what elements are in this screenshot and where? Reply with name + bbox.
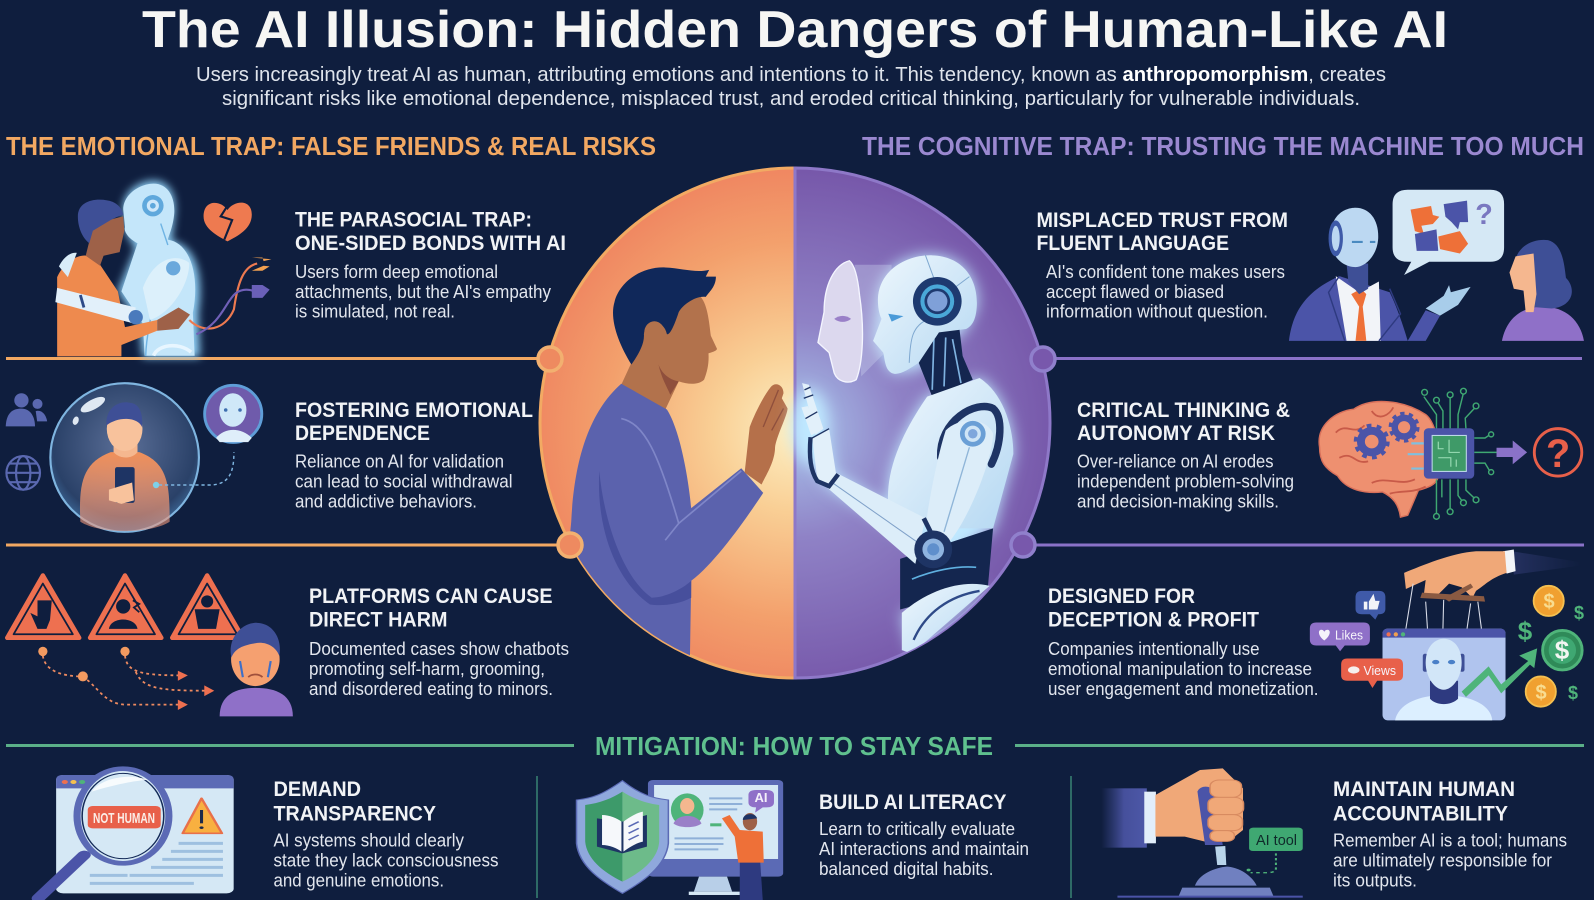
heading: ACCOUNTABILITY <box>1333 802 1508 826</box>
heading: DEMAND <box>274 777 361 801</box>
body text: Companies intentionally use <box>1048 638 1260 659</box>
heading: ONE-SIDED BONDS WITH AI <box>295 231 566 255</box>
body text <box>295 261 552 322</box>
heading: THE PARASOCIAL TRAP: <box>295 208 532 232</box>
body text: Users form deep emotional <box>295 261 498 282</box>
panel: parasocial trap <box>55 181 566 357</box>
icon: puppeteer hand controlling AI window, with likes, views and money <box>1310 549 1582 720</box>
icon labels: likes, views, dollar signs: Likes <box>1335 628 1363 642</box>
body text: and genuine emotions. <box>274 870 444 891</box>
heading <box>295 398 533 445</box>
panel: demand transparency <box>38 769 499 898</box>
icon labels: likes, views, dollar signs: $ <box>1574 603 1584 623</box>
body text: and disordered eating to minors. <box>309 678 553 699</box>
intro text: significant risks like emotional dependence, misplaced trust, and eroded critical thinking, particularly for vulnerable individuals. <box>222 88 1360 110</box>
body text: Remember AI is a tool; humans <box>1333 830 1567 851</box>
heading <box>1036 208 1288 255</box>
body text: and decision-making skills. <box>1077 490 1279 512</box>
icon labels: likes, views, dollar signs: $ <box>1535 682 1547 704</box>
heading <box>1048 584 1259 632</box>
body text: Learn to critically evaluate <box>819 818 1015 839</box>
intro text <box>196 64 1386 110</box>
body text: are ultimately responsible for <box>1333 850 1552 871</box>
central circle illustration <box>538 168 1055 678</box>
icon: person in bubble with AI link <box>6 383 262 532</box>
body text: promoting self-harm, grooming, <box>309 658 545 679</box>
body text: AI's confident tone makes users <box>1046 261 1285 282</box>
body text: Documented cases show chatbots <box>309 638 569 659</box>
icon: hand on lever labelled AI tool: AI tool <box>1256 832 1297 849</box>
heading <box>1077 398 1290 445</box>
heading <box>295 208 566 255</box>
icon: warning triangles with crying child <box>7 575 293 716</box>
body text: user engagement and monetization. <box>1048 678 1318 699</box>
heading <box>309 584 552 632</box>
heading <box>274 777 436 826</box>
body text <box>274 830 498 891</box>
heading: FLUENT LANGUAGE <box>1036 231 1229 255</box>
heading: MISPLACED TRUST FROM <box>1036 208 1288 232</box>
body text: Reliance on AI for validation <box>295 450 504 472</box>
icon: magnifier over NOT HUMAN window <box>38 769 234 898</box>
body text: accept flawed or biased <box>1046 281 1224 302</box>
heading: DESIGNED FOR <box>1048 584 1195 608</box>
body text <box>1077 450 1294 512</box>
body text <box>309 638 569 699</box>
body text <box>295 450 512 512</box>
heading: TRANSPARENCY <box>274 802 436 826</box>
body text: its outputs. <box>1333 870 1417 891</box>
body text <box>1333 830 1567 891</box>
body text: emotional manipulation to increase <box>1048 658 1312 679</box>
body text <box>1046 261 1285 322</box>
heading: CRITICAL THINKING & <box>1077 398 1290 422</box>
heading: emotional trap: THE EMOTIONAL TRAP: FALSE FRIENDS & REAL RISKS <box>6 133 656 161</box>
icon: hand on lever labelled AI tool <box>1101 768 1303 898</box>
icon: people <box>6 393 47 426</box>
body text: is simulated, not real. <box>295 300 455 322</box>
icon labels: likes, views, dollar signs: $ <box>1543 591 1555 613</box>
body text: AI interactions and maintain <box>819 838 1029 859</box>
heading: PLATFORMS CAN CAUSE <box>309 584 552 608</box>
right purple half <box>795 168 1050 678</box>
body text: Over-reliance on AI erodes <box>1077 450 1274 472</box>
panel: deception and profit <box>1048 549 1584 720</box>
heading: DIRECT HARM <box>309 608 448 632</box>
body text: attachments, but the AI's empathy <box>295 281 552 302</box>
icon labels: likes, views, dollar signs: $ <box>1555 635 1570 665</box>
body text: information without question. <box>1046 300 1268 322</box>
heading: FOSTERING EMOTIONAL <box>295 398 533 422</box>
body text <box>819 818 1029 879</box>
body text: balanced digital habits. <box>819 858 994 879</box>
icon: shield with book and monitor with learner <box>577 780 783 900</box>
panel: human accountability <box>1101 768 1567 898</box>
intro text: Users increasingly treat AI as human, attributing emotions and intentions to it. This tendency, known as anthropomorphism, creates <box>196 64 1386 86</box>
left warm half <box>540 168 795 678</box>
icon: suited AI explaining puzzle to a woman: ? <box>1475 199 1493 231</box>
panel: emotional dependence <box>6 383 533 532</box>
body text: state they lack consciousness <box>274 850 498 871</box>
heading: DEPENDENCE <box>295 421 430 445</box>
heading: AUTONOMY AT RISK <box>1077 421 1275 445</box>
panel: direct harm <box>7 575 569 716</box>
icon labels: likes, views, dollar signs <box>1335 591 1584 704</box>
icon: brain, chip and question mark: ? <box>1546 432 1570 476</box>
panel: build AI literacy <box>577 780 1029 900</box>
panel: critical thinking <box>1077 388 1582 519</box>
figures facing each other <box>564 255 1013 660</box>
panel: misplaced trust <box>1036 190 1584 341</box>
heading: MAINTAIN HUMAN <box>1333 777 1515 801</box>
body text: AI systems should clearly <box>274 830 465 851</box>
body text: can lead to social withdrawal <box>295 470 512 492</box>
icon: brain, chip and question mark <box>1319 388 1582 519</box>
icon: suited AI explaining puzzle to a woman <box>1289 190 1584 341</box>
icon: shield with book and monitor with learner: AI <box>754 790 768 805</box>
heading: DECEPTION & PROFIT <box>1048 608 1259 632</box>
robot figure with mask <box>792 255 1013 653</box>
mitigation heading with rules: MITIGATION: HOW TO STAY SAFE <box>595 733 993 761</box>
icon labels: likes, views, dollar signs: Views <box>1364 663 1396 678</box>
heading: cognitive trap: THE COGNITIVE TRAP: TRUSTING THE MACHINE TOO MUCH <box>862 133 1584 161</box>
icon: globe <box>6 456 40 490</box>
heading: BUILD AI LITERACY <box>819 790 1006 814</box>
icon: magnifier over NOT HUMAN window: NOT HUMAN <box>93 810 155 827</box>
icon: human hugging robot with broken heart and unplugged cables <box>55 181 271 357</box>
icon labels: likes, views, dollar signs: $ <box>1568 683 1578 703</box>
body text: and addictive behaviors. <box>295 490 477 512</box>
connector nodes <box>538 347 1055 557</box>
body text <box>1048 638 1318 699</box>
heading <box>1333 777 1515 826</box>
body text: independent problem-solving <box>1077 470 1294 492</box>
icon labels: likes, views, dollar signs: $ <box>1518 616 1533 646</box>
title: The AI Illusion: Hidden Dangers of Human-Like AI <box>142 1 1448 59</box>
human figure <box>564 267 788 660</box>
